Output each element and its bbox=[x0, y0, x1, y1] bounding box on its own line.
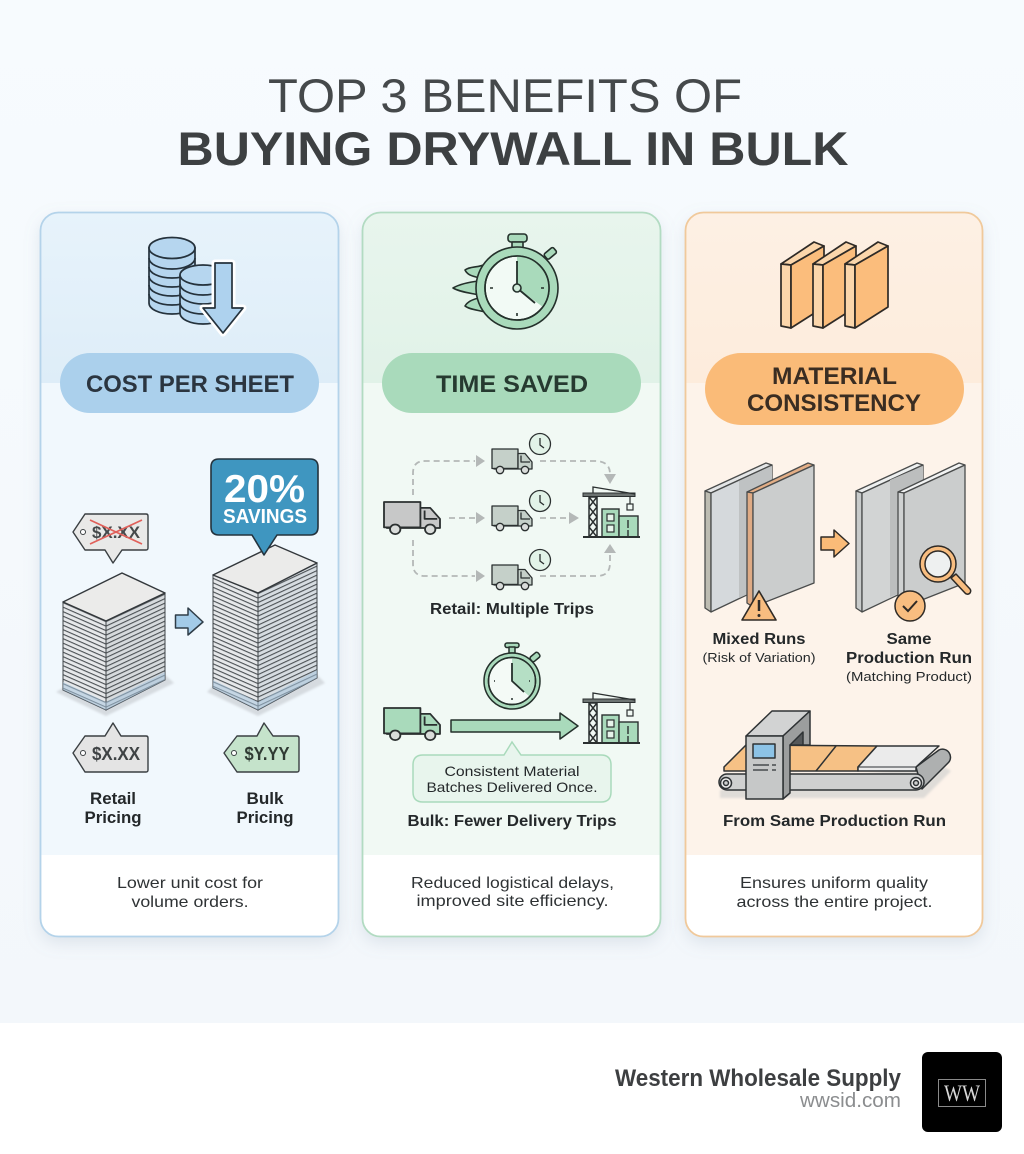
callout: 20% savings: SAVINGS bbox=[223, 506, 307, 528]
callout: 20% savings: 20% bbox=[224, 468, 305, 511]
title bbox=[178, 69, 849, 175]
title: BUYING DRYWALL IN BULK bbox=[178, 122, 849, 175]
summary: time saved: Reduced logistical delays, bbox=[411, 875, 614, 892]
callout: consistent material: Consistent Material bbox=[444, 763, 580, 779]
panel: material consistency bbox=[685, 212, 983, 937]
icon: truck trip 2 bbox=[492, 506, 532, 531]
label: same production run bbox=[846, 631, 972, 684]
icon: construction site bbox=[583, 693, 640, 743]
title: TOP 3 BENEFITS OF bbox=[268, 69, 742, 122]
summary: cost per sheet: volume orders. bbox=[132, 894, 248, 911]
panel: time saved bbox=[362, 212, 661, 937]
dashed routes bbox=[413, 461, 610, 576]
summary: material consistency bbox=[736, 875, 932, 911]
summary: material consistency: across the entire project. bbox=[736, 894, 932, 911]
label: bulk pricing: Bulk bbox=[246, 789, 284, 808]
label: retail multiple trips: Retail: Multiple Trips bbox=[430, 601, 594, 618]
label: retail pricing bbox=[84, 789, 142, 827]
label: bulk pricing: Pricing bbox=[236, 808, 294, 827]
callout: consistent material bbox=[413, 742, 611, 802]
brand name: Western Wholesale Supply bbox=[615, 1065, 902, 1092]
diagram: retail multiple trips bbox=[384, 434, 640, 590]
drywall: same production run bbox=[856, 463, 965, 612]
heading pill: cost per sheet bbox=[60, 353, 319, 413]
icon: construction site bbox=[583, 487, 640, 537]
icon: warning triangle bbox=[742, 591, 776, 620]
arrow: retail to bulk bbox=[176, 608, 203, 635]
icon: three boards bbox=[781, 242, 888, 328]
label: same production run: (Matching Product) bbox=[846, 669, 972, 684]
summary: cost per sheet: Lower unit cost for bbox=[117, 875, 264, 892]
summary: cost per sheet bbox=[117, 875, 264, 911]
arrow: direct delivery bbox=[451, 713, 578, 739]
heading pill: material consistency bbox=[705, 353, 964, 425]
summary: time saved bbox=[411, 875, 614, 910]
crossed-out retail price tag bbox=[73, 514, 148, 563]
icon: clock 3 bbox=[530, 550, 550, 570]
icon: stopwatch bbox=[484, 643, 541, 709]
icon: magnifier bbox=[920, 546, 971, 594]
summary: time saved: improved site efficiency. bbox=[416, 893, 608, 910]
label: same production run: Production Run bbox=[846, 650, 972, 667]
label: bulk fewer trips: Bulk: Fewer Delivery Trips bbox=[408, 813, 617, 830]
heading pill: cost per sheet: COST PER SHEET bbox=[86, 371, 294, 398]
price tag: bulk: $Y.YY bbox=[244, 744, 290, 764]
logo: WW bbox=[944, 1081, 980, 1106]
callout: consistent material: Batches Delivered Once. bbox=[426, 779, 598, 795]
bulk sheet stack bbox=[207, 545, 325, 716]
label: mixed runs: Mixed Runs bbox=[712, 631, 806, 648]
heading pill: material consistency: MATERIAL bbox=[772, 363, 897, 390]
icon: grey truck bbox=[384, 502, 440, 534]
price tag: retail bbox=[73, 723, 148, 772]
label: bulk pricing bbox=[236, 789, 294, 827]
icon: green truck bbox=[384, 708, 440, 740]
icon: coin stacks with down arrow bbox=[149, 238, 243, 333]
icon: truck trip 1 bbox=[492, 449, 532, 474]
icon: clock 1 bbox=[530, 434, 550, 454]
label: retail pricing: Pricing bbox=[84, 808, 142, 827]
heading pill: time saved: TIME SAVED bbox=[436, 371, 588, 398]
icon: check badge bbox=[895, 591, 925, 621]
heading pill: material consistency: CONSISTENCY bbox=[747, 390, 921, 417]
footer band bbox=[0, 1023, 1024, 1154]
panel: cost per sheet bbox=[40, 212, 339, 937]
summary: material consistency: Ensures uniform quality bbox=[740, 875, 928, 892]
icon: truck trip 3 bbox=[492, 565, 532, 590]
logo bbox=[922, 1052, 1002, 1132]
label: retail pricing: Retail bbox=[90, 789, 136, 808]
label: mixed runs bbox=[702, 631, 816, 665]
icon: speeding stopwatch bbox=[453, 234, 558, 329]
retail sheet stack bbox=[56, 573, 174, 716]
icon: clock 2 bbox=[530, 490, 550, 512]
label: same production run: Same bbox=[886, 631, 932, 648]
callout: 20% savings bbox=[211, 459, 318, 555]
heading pill: time saved bbox=[382, 353, 641, 413]
drywall: mixed runs bbox=[705, 463, 814, 612]
crossed-out retail price tag: $X.XX bbox=[92, 523, 141, 542]
label: from same production run: From Same Production Run bbox=[723, 813, 946, 830]
arrow: mixed to same bbox=[821, 530, 849, 557]
price tag: bulk bbox=[224, 723, 299, 772]
illustration: conveyor and machine bbox=[719, 711, 951, 799]
label: mixed runs: (Risk of Variation) bbox=[702, 650, 816, 665]
route arrowheads bbox=[476, 455, 616, 582]
price tag: retail: $X.XX bbox=[92, 744, 140, 764]
website: wwsid.com bbox=[799, 1090, 901, 1112]
